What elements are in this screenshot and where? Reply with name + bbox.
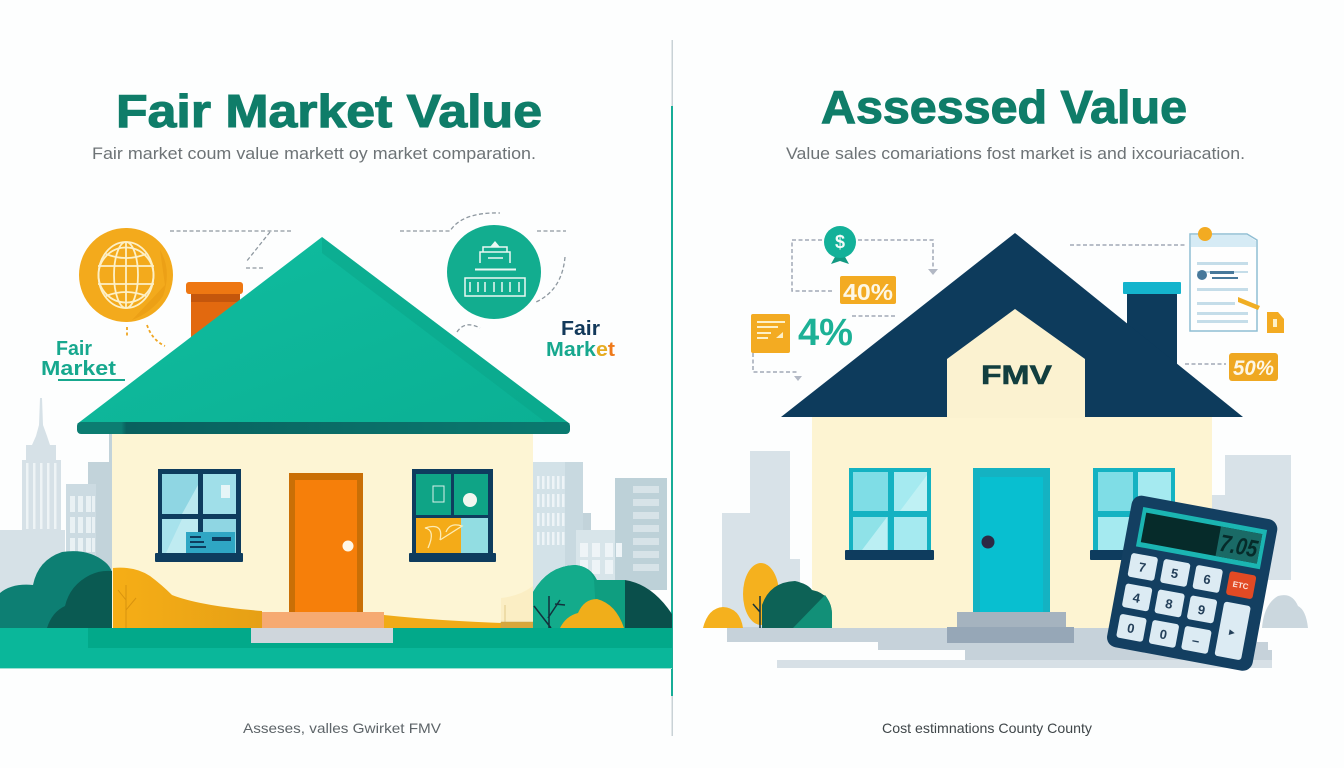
- calculator: 0: [1158, 626, 1168, 642]
- icon: county building: [447, 225, 541, 319]
- gable label: FMV: [981, 360, 1052, 390]
- label: fair market right: Market: [546, 339, 615, 361]
- door: [289, 473, 363, 613]
- calculator: 5: [1170, 565, 1180, 581]
- calculator: 8: [1164, 596, 1174, 612]
- calculator: –: [1191, 632, 1201, 648]
- calculator: 4: [1132, 590, 1142, 606]
- label: fair market left: [41, 338, 125, 381]
- body: [1105, 494, 1279, 672]
- bushes right panel: [703, 563, 832, 628]
- house right: [781, 233, 1243, 643]
- dashed connectors left: [170, 213, 566, 332]
- title: assessed value: Assessed Value: [821, 81, 1187, 133]
- calculator: ▸: [1227, 627, 1236, 639]
- label: fair market right: [546, 318, 615, 361]
- gable: [947, 309, 1085, 418]
- label: fair market right: Fair: [561, 318, 600, 340]
- panel: fair market value: [0, 85, 672, 736]
- center divider: [671, 40, 673, 736]
- wall: [112, 430, 533, 628]
- chimney left: [186, 282, 243, 350]
- icon: globe: [79, 228, 173, 322]
- callout: 40 percent: 40%: [843, 279, 893, 305]
- display: [1136, 507, 1267, 569]
- panel: assessed value: [703, 81, 1308, 736]
- window left: [845, 468, 934, 560]
- steps left: [251, 612, 393, 643]
- caption right: Cost estimnations County County: [882, 720, 1092, 736]
- window right: [1090, 468, 1175, 560]
- door: [973, 468, 1050, 613]
- eave: [77, 422, 570, 434]
- bushes left of house: [0, 551, 112, 628]
- icon: dollar badge: [824, 226, 856, 264]
- ground left: [0, 628, 672, 669]
- dashed connectors right: [753, 240, 1226, 372]
- callout: 4 percent: 4%: [798, 312, 853, 354]
- dashed orange connectors: [127, 325, 165, 346]
- chimney right: [1123, 282, 1181, 370]
- right window: [409, 469, 496, 562]
- subtitle left: Fair market coum value markett oy market comparation.: [92, 145, 536, 163]
- calculator: 7.05: [1217, 530, 1260, 563]
- background city right: [722, 451, 1308, 628]
- keypad: [1116, 553, 1257, 660]
- calculator: 7: [1137, 559, 1147, 575]
- house left: [77, 237, 570, 628]
- calculator: [1105, 494, 1279, 672]
- icon: document amber: [751, 314, 790, 353]
- calculator: 9: [1197, 602, 1206, 618]
- label: fair market left: Market: [41, 358, 116, 380]
- calculator: ETC: [1232, 580, 1249, 591]
- roof: [77, 237, 570, 424]
- title: fair market value: Fair Market Value: [116, 85, 542, 137]
- background city left: [0, 398, 667, 600]
- bushes right of house: [533, 565, 672, 628]
- steps: [947, 612, 1074, 643]
- label: fair market left: Fair: [56, 338, 92, 360]
- amber lawn mound: [113, 568, 262, 628]
- left window: [155, 469, 243, 562]
- roof: [781, 233, 1243, 417]
- wall: [812, 410, 1212, 628]
- caption left: Asseses, valles Gwirket FMV: [243, 720, 442, 736]
- subtitle right: Value sales comariations fost market is and ixcouriacation.: [786, 145, 1245, 163]
- icon: assessment document: [1190, 227, 1284, 333]
- callout: 50 percent: 50%: [1233, 357, 1274, 380]
- calculator: 0: [1126, 620, 1136, 636]
- arrowheads: [794, 269, 938, 381]
- icon: dollar badge: $: [835, 232, 845, 252]
- calculator: 6: [1202, 571, 1212, 587]
- ground right: [727, 627, 1272, 668]
